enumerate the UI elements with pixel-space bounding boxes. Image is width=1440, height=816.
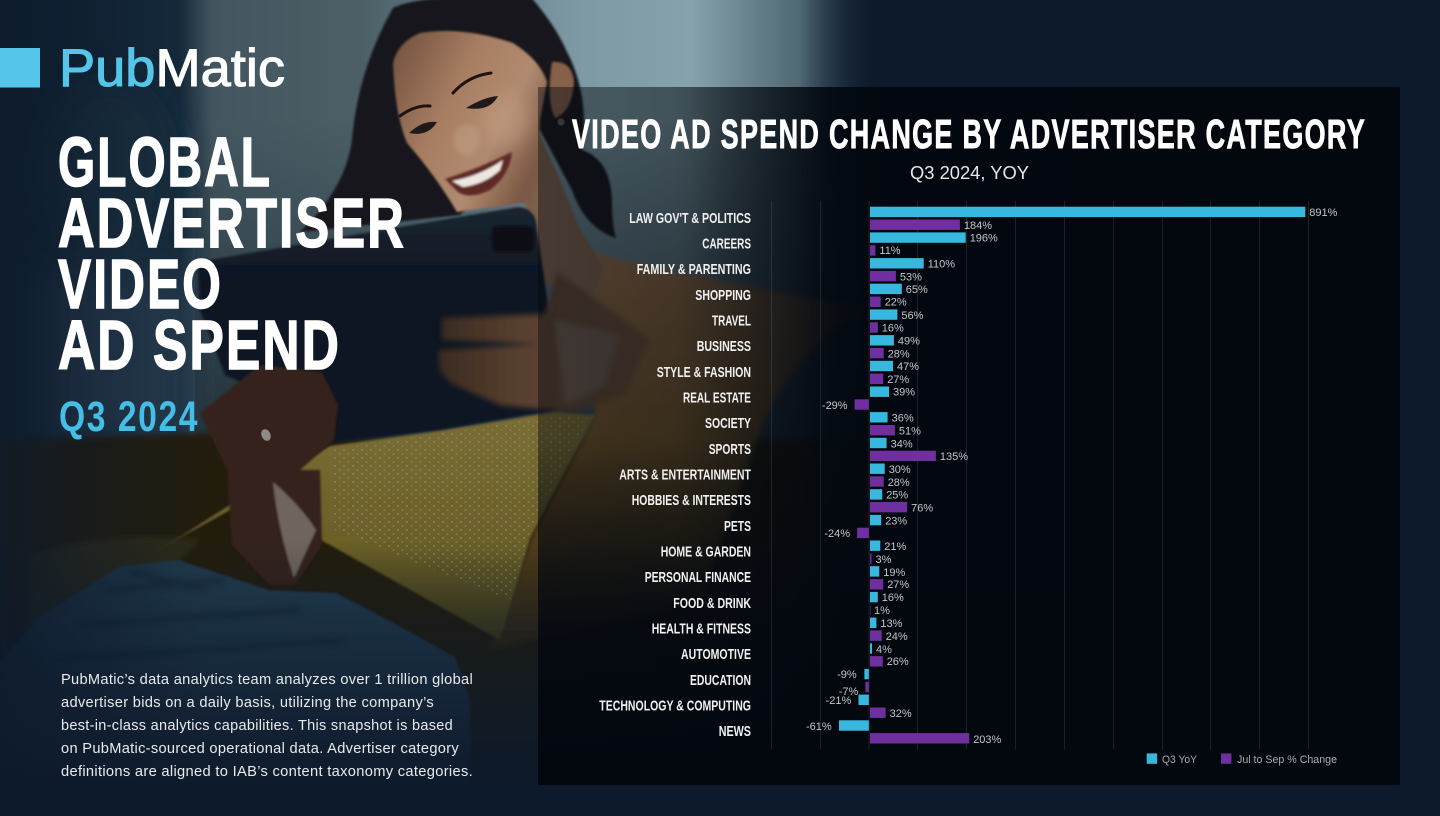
category labels: TRAVEL — [712, 312, 751, 330]
category labels: LAW GOV'T & POLITICS — [629, 210, 751, 227]
category labels: HOBBIES & INTERESTS — [632, 492, 751, 509]
category labels: REAL ESTATE — [683, 390, 751, 406]
value labels: 16% — [882, 323, 904, 335]
value labels: 23% — [885, 516, 907, 528]
category labels: PERSONAL FINANCE — [645, 569, 751, 586]
value labels: 53% — [900, 272, 922, 284]
category labels: EDUCATION — [690, 672, 751, 689]
value labels: 24% — [886, 631, 908, 643]
value labels: 135% — [940, 451, 968, 463]
category labels: HOME & GARDEN — [661, 544, 751, 560]
value labels: 32% — [890, 708, 912, 720]
category labels: FAMILY & PARENTING — [637, 261, 751, 278]
value labels: -21% — [826, 695, 852, 707]
legend: Q3 YoY — [1162, 754, 1198, 766]
value labels: 49% — [898, 336, 920, 348]
category labels — [599, 210, 751, 740]
value labels: 76% — [911, 502, 933, 514]
value labels: 30% — [889, 464, 911, 476]
legend — [1147, 753, 1337, 766]
tablet camera — [492, 226, 534, 252]
value labels: 34% — [891, 438, 913, 450]
value labels: 39% — [893, 386, 915, 398]
sofa — [0, 432, 900, 816]
nose — [454, 124, 480, 156]
category labels: AUTOMOTIVE — [681, 646, 751, 663]
value labels: 203% — [973, 734, 1002, 746]
tablet — [198, 207, 556, 445]
methodology text: advertiser bids on a daily basis, utilizing the company’s — [61, 695, 434, 711]
Jul to Sep % Change bars — [855, 220, 969, 744]
neck — [525, 130, 603, 305]
methodology text — [61, 672, 473, 780]
value labels: 36% — [892, 412, 914, 424]
category labels: SOCIETY — [705, 415, 751, 432]
value labels: 891% — [1309, 207, 1338, 219]
value labels: -24% — [824, 528, 850, 540]
category labels: SPORTS — [709, 441, 751, 458]
category labels: TECHNOLOGY & COMPUTING — [599, 698, 751, 714]
value labels — [806, 207, 1338, 746]
value labels: 3% — [876, 554, 892, 566]
methodology text: best-in-class analytics capabilities. This snapshot is based — [61, 718, 453, 734]
shirt — [134, 412, 595, 640]
value labels: 27% — [887, 579, 909, 591]
value labels: 51% — [899, 426, 921, 438]
logo — [0, 39, 285, 98]
value labels: 25% — [886, 490, 908, 502]
category labels: CAREERS — [702, 236, 751, 252]
value labels: 196% — [970, 233, 998, 245]
brows — [400, 73, 491, 116]
main heading: VIDEO — [58, 245, 223, 323]
value labels: 184% — [964, 220, 992, 232]
value labels: 1% — [874, 605, 890, 617]
ear — [550, 62, 574, 118]
ring — [259, 428, 273, 442]
shoulder and arm — [490, 252, 870, 650]
methodology text: definitions are aligned to IAB’s content taxonomy categories. — [61, 764, 473, 780]
value labels: -29% — [822, 400, 848, 412]
blanket — [0, 560, 470, 816]
value labels: -7% — [839, 686, 859, 698]
eyes — [409, 96, 498, 134]
category labels: FOOD & DRINK — [673, 595, 751, 612]
legend: Jul to Sep % Change — [1237, 754, 1337, 766]
bar chart — [599, 201, 1338, 766]
main heading: ADVERTISER — [58, 184, 406, 262]
chart subtitle: Q3 2024, YOY — [910, 163, 1029, 183]
methodology text: on PubMatic-sourced operational data. Advertiser category — [61, 741, 459, 757]
value labels: 28% — [888, 477, 910, 489]
logo square — [0, 48, 40, 88]
value labels: 56% — [901, 310, 924, 322]
value labels: 47% — [897, 361, 919, 373]
logo wordmark: PubMatic — [59, 39, 285, 98]
photo fades — [0, 0, 200, 816]
category labels: SHOPPING — [695, 287, 751, 304]
category labels: STYLE & FASHION — [657, 364, 751, 381]
category labels: ARTS & ENTERTAINMENT — [619, 466, 751, 484]
value labels: 13% — [880, 618, 903, 630]
methodology text: PubMatic’s data analytics team analyzes over 1 trillion global — [61, 672, 473, 688]
value labels: 19% — [883, 567, 906, 579]
value labels: 4% — [876, 644, 892, 656]
category labels: NEWS — [719, 723, 751, 740]
main heading: GLOBAL — [58, 123, 272, 201]
left hand and forearm — [200, 365, 338, 585]
value labels: 16% — [882, 592, 904, 604]
value labels: 27% — [887, 374, 909, 386]
value labels: -61% — [806, 721, 832, 733]
Q3 YoY bars — [839, 207, 1305, 731]
hair — [300, 0, 616, 238]
category labels: PETS — [724, 518, 751, 535]
value labels: 11% — [879, 245, 901, 257]
value labels: -9% — [837, 669, 857, 681]
cheek highlight — [481, 94, 529, 146]
value labels: 28% — [888, 348, 910, 360]
panel: chart — [538, 87, 1400, 785]
value labels: 22% — [885, 296, 907, 308]
main heading: AD SPEND — [58, 306, 341, 384]
smile — [445, 152, 512, 196]
value labels: 26% — [887, 656, 909, 668]
value labels: 65% — [906, 284, 928, 296]
value labels: 110% — [928, 258, 955, 270]
category labels: BUSINESS — [697, 338, 751, 355]
value labels: 21% — [884, 541, 907, 553]
right hand — [438, 272, 650, 412]
period subheading: Q3 2024 — [59, 393, 199, 441]
face — [393, 31, 547, 212]
earring — [557, 118, 565, 126]
main heading — [58, 123, 406, 384]
category labels: HEALTH & FITNESS — [652, 620, 751, 638]
